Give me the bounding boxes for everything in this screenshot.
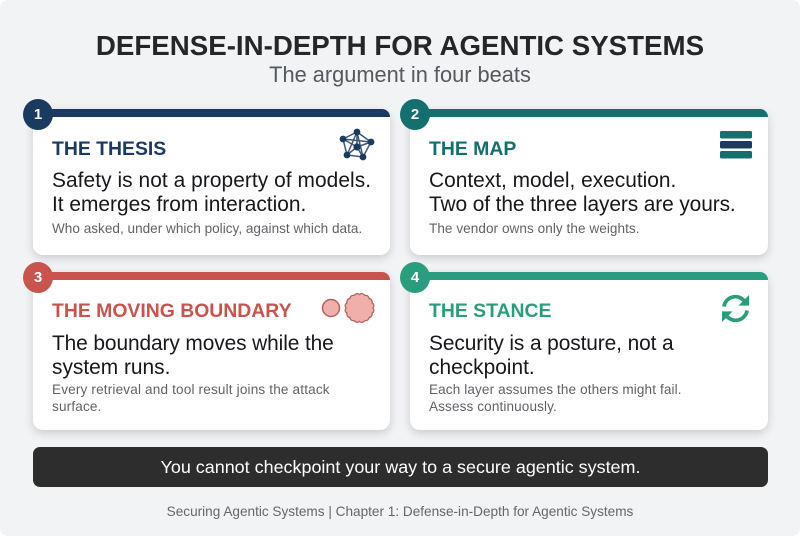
heading: THE MOVING BOUNDARY	[52, 300, 292, 322]
icon: growing boundary circles	[322, 293, 374, 323]
callout banner	[33, 447, 768, 487]
supporting note: Assess continuously.	[429, 399, 557, 414]
heading: THE MAP	[429, 138, 516, 160]
main statement	[52, 332, 334, 378]
number badge 1	[23, 99, 53, 130]
accent bar	[410, 272, 768, 280]
accent bar	[33, 109, 390, 117]
icon: cycle arrows	[722, 294, 750, 322]
panel: the stance	[410, 272, 768, 430]
supporting note: Who asked, under which policy, against which data.	[52, 221, 362, 236]
supporting note	[52, 382, 330, 414]
number badge 2	[400, 99, 430, 130]
accent bar	[33, 272, 390, 280]
panel: the thesis	[33, 109, 390, 255]
main statement	[429, 169, 736, 216]
main statement	[52, 169, 371, 216]
panel: the map	[410, 109, 768, 255]
subtitle: The argument in four beats	[269, 62, 531, 87]
main statement	[429, 332, 674, 378]
number badge 2: 2	[411, 106, 419, 123]
number badge 4	[400, 262, 430, 293]
heading: THE THESIS	[52, 138, 166, 160]
main statement: Safety is not a property of models.	[52, 169, 371, 192]
icon: network	[340, 128, 374, 160]
main statement: checkpoint.	[429, 356, 535, 378]
title: DEFENSE-IN-DEPTH FOR AGENTIC SYSTEMS	[96, 30, 704, 61]
number badge 4: 4	[411, 269, 419, 286]
main statement: It emerges from interaction.	[52, 192, 306, 216]
heading: THE STANCE	[429, 300, 551, 322]
icon: layers	[720, 131, 752, 158]
panel: the moving boundary	[33, 272, 390, 430]
supporting note: Every retrieval and tool result joins the attack	[52, 382, 330, 397]
supporting note: surface.	[52, 399, 102, 414]
supporting note: Each layer assumes the others might fail.	[429, 382, 682, 397]
number badge 3	[23, 262, 53, 293]
main statement: The boundary moves while the	[52, 332, 334, 355]
main statement: Security is a posture, not a	[429, 332, 674, 355]
number badge 3: 3	[34, 269, 42, 286]
main statement: Context, model, execution.	[429, 169, 676, 192]
supporting note	[429, 382, 682, 414]
footer: Securing Agentic Systems | Chapter 1: Defense-in-Depth for Agentic Systems	[167, 504, 633, 519]
main statement: system runs.	[52, 356, 170, 378]
accent bar	[410, 109, 768, 117]
main statement: Two of the three layers are yours.	[429, 192, 736, 216]
callout banner: You cannot checkpoint your way to a secure agentic system.	[161, 457, 640, 477]
supporting note: The vendor owns only the weights.	[429, 221, 640, 236]
number badge 1: 1	[34, 106, 42, 123]
